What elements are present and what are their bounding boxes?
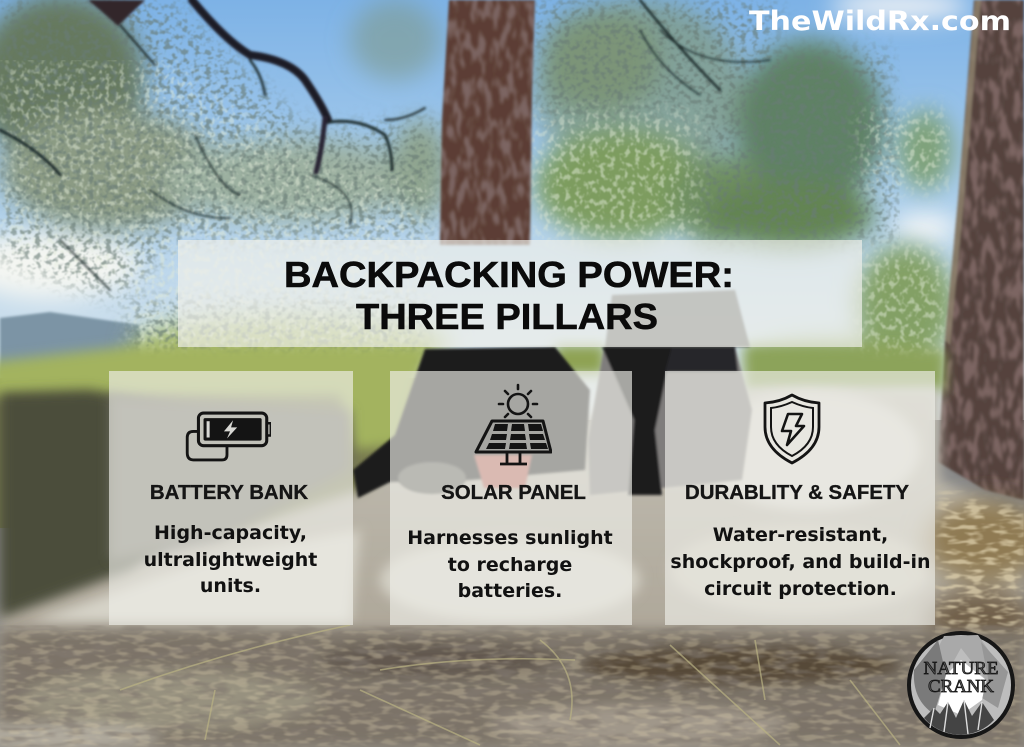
title panel [178,240,862,347]
description: durability and safety [670,524,931,600]
green undergrowth [0,345,945,450]
foliage needle texture [0,60,950,372]
panel: durability and safety [665,371,935,625]
description: battery bank [144,522,317,597]
black dog [353,347,590,498]
description: battery bank: High-capacity, [154,522,307,544]
grey rock under first card [110,395,350,560]
ground rock surface [0,388,1024,747]
logo: Nature Crank badge: NATURE [924,658,999,678]
dog paw [398,462,466,494]
logo: Nature Crank badge: CRANK [928,676,994,696]
heading: durablity and safety: DURABLITY & SAFETY [685,482,909,504]
description: solar panel: to recharge [448,554,572,576]
title heading [284,254,734,337]
description: durability and safety: shockproof, and build-in [670,551,931,573]
description: battery bank: ultralightweight [144,549,317,571]
title heading: BACKPACKING POWER: [284,254,734,295]
right trunk [938,0,1024,500]
pale rock highlights [30,390,930,622]
description: battery bank: units. [200,575,261,597]
distant mountain [0,312,140,375]
panel: battery bank [109,371,353,625]
icon: battery bank [186,412,271,462]
center trunk [440,0,535,245]
description: solar panel: Harnesses sunlight [407,527,613,549]
description: durability and safety: Water-resistant, [713,524,888,546]
icon: shield with lightning bolt [764,394,820,464]
shaded foreground [0,630,1024,747]
description: durability and safety: circuit protection. [704,578,897,600]
base behind undergrowth and boulder [0,378,420,528]
pine branches [0,0,770,290]
pine needles on ground [120,625,900,745]
heading: solar panel: SOLAR PANEL [441,482,586,504]
red bowl [474,455,532,488]
description: solar panel [407,527,613,602]
panel: solar panel [390,371,632,625]
watermark: TheWildRx.com: TheWildRx.com [749,6,1011,37]
heading: battery bank: BATTERY BANK [150,482,308,504]
mossy boulder [0,390,200,618]
logo: Nature Crank badge [907,631,1015,739]
sky whites [0,0,970,300]
backpack [588,290,752,495]
golden pine litter at right [925,500,1024,650]
title heading: THREE PILLARS [356,296,658,337]
foliage masses [0,0,955,380]
description: solar panel: batteries. [458,580,562,602]
icon: sun and solar panel [474,384,552,466]
